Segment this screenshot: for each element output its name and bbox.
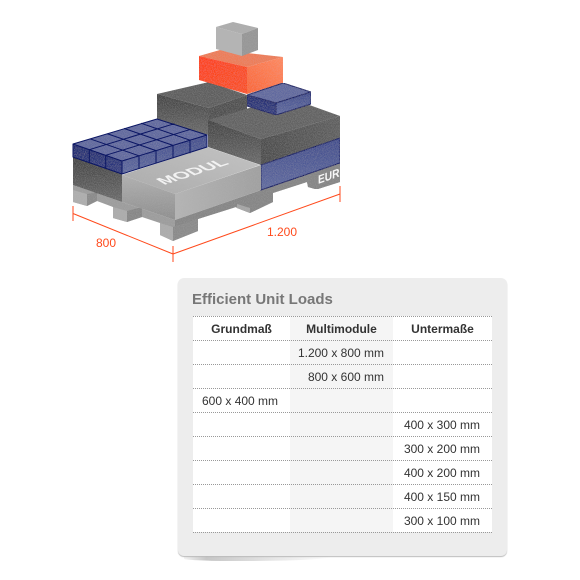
header row: Untermaße: [411, 322, 474, 336]
header row: Grundmaß: [211, 322, 272, 336]
row 400 x 150: [193, 484, 492, 508]
label 800: 800: [96, 236, 116, 250]
row 300 x 200: 300 x 200 mm: [404, 442, 480, 456]
pallet: [73, 163, 340, 241]
cargo blocks: [73, 82, 340, 220]
dark block front right: [208, 97, 340, 165]
pallet diagram: [72, 22, 340, 262]
header row: [193, 316, 492, 340]
panel shadow: [184, 553, 334, 561]
dimension line 800: [73, 206, 173, 262]
row 400 x 200: 400 x 200 mm: [404, 466, 480, 480]
dark block left: [73, 157, 122, 202]
module block: [122, 147, 261, 220]
EUR label: EUR: [318, 167, 340, 187]
row 1200 x 800: [193, 340, 492, 364]
gray cube: [216, 22, 258, 56]
row 300 x 100: [193, 508, 492, 532]
row 800 x 600: 800 x 600 mm: [308, 370, 384, 384]
row 300 x 200: [193, 436, 492, 460]
panel: efficient unit loads: [178, 278, 507, 556]
dark block rear: [157, 82, 247, 135]
row 400 x 150: 400 x 150 mm: [404, 490, 480, 504]
heading: Efficient Unit Loads: [192, 291, 333, 308]
row 800 x 600: [193, 364, 492, 388]
dimension line 1.200: [173, 186, 340, 254]
blue slab front right: [261, 138, 340, 190]
row 400 x 200: [193, 460, 492, 484]
blue box small: [247, 83, 311, 115]
header row: Multimodule: [306, 322, 377, 336]
row 600 x 400: 600 x 400 mm: [202, 394, 278, 408]
orange box: [199, 50, 283, 94]
blue small boxes grid: [73, 119, 207, 174]
row 1200 x 800: 1.200 x 800 mm: [298, 346, 384, 360]
table: [193, 316, 492, 532]
row 600 x 400: [193, 388, 492, 412]
row 300 x 100: 300 x 100 mm: [404, 514, 480, 528]
row 400 x 300: [193, 412, 492, 436]
row 400 x 300: 400 x 300 mm: [404, 418, 480, 432]
label 1.200: 1.200: [267, 225, 297, 239]
MODUL label: MODUL: [152, 156, 233, 187]
